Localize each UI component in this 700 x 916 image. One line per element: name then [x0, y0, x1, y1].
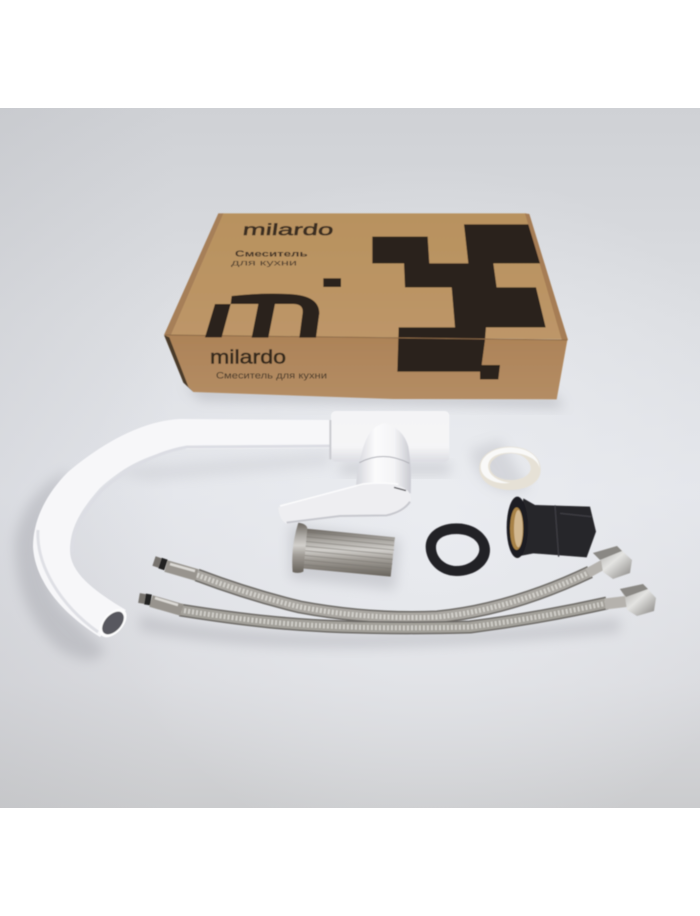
front text: Смеситель для кухни: [216, 370, 327, 380]
upper hose: [197, 572, 590, 618]
dome seam: [359, 456, 409, 463]
lower hose: [180, 603, 607, 628]
small square: [323, 278, 341, 287]
white curved spout: [33, 419, 332, 642]
white ring gasket: [479, 447, 541, 490]
black rubber gasket: [426, 523, 490, 576]
fitting hex highlight: [555, 505, 592, 557]
handle lower shading: [287, 502, 410, 523]
top logo milardo: milardo: [242, 221, 335, 239]
ring highlight: [481, 447, 539, 483]
front logo milardo: milardo: [210, 347, 286, 368]
ring edge: [479, 447, 541, 490]
handle accent: [394, 487, 406, 491]
photo background: [0, 108, 700, 808]
upper left fitting: [154, 561, 197, 575]
fitting body: [517, 498, 596, 557]
tap junction shadow: [329, 420, 331, 459]
lower left fitting: [139, 598, 182, 610]
spout tube: [33, 419, 332, 637]
handle top edge: [280, 483, 398, 506]
spout outer shading: [38, 530, 98, 632]
text: for kitchen: для кухни: [231, 258, 298, 268]
cardboard box: [164, 213, 568, 399]
box front face: [165, 335, 567, 399]
box edge line: [165, 335, 567, 340]
aerator rim: [94, 604, 132, 642]
threaded mounting tube: [292, 523, 395, 577]
threads: [303, 532, 394, 573]
box right flap: [525, 213, 568, 340]
aerator mesh: [98, 608, 128, 638]
brass inner: [514, 510, 523, 547]
text: mixer: Смеситель: [235, 249, 308, 259]
upper right ferrule: [588, 563, 606, 573]
tube body: [302, 528, 395, 577]
flange: [292, 523, 307, 573]
box front left edge: [164, 335, 193, 392]
black pixel graphic: [372, 224, 546, 379]
spout underside shading: [72, 446, 332, 552]
upper hex nut: [593, 546, 632, 579]
tap dome: [356, 423, 411, 493]
box left flap: [164, 213, 223, 335]
tap body: [278, 411, 449, 524]
lower hex nut: [620, 584, 656, 616]
tap horizontal cylinder: [331, 411, 449, 462]
black plastic fitting: [507, 497, 596, 558]
brass insert: [510, 507, 523, 550]
shadows on the surface: [15, 385, 620, 660]
lever handle: [278, 484, 411, 524]
braided hoses: [139, 561, 630, 628]
box top face: [165, 213, 567, 339]
large m logo: [205, 294, 319, 338]
lower right ferrule: [605, 601, 630, 604]
product photo composition: [0, 108, 700, 808]
fitting mouth: [507, 497, 528, 558]
